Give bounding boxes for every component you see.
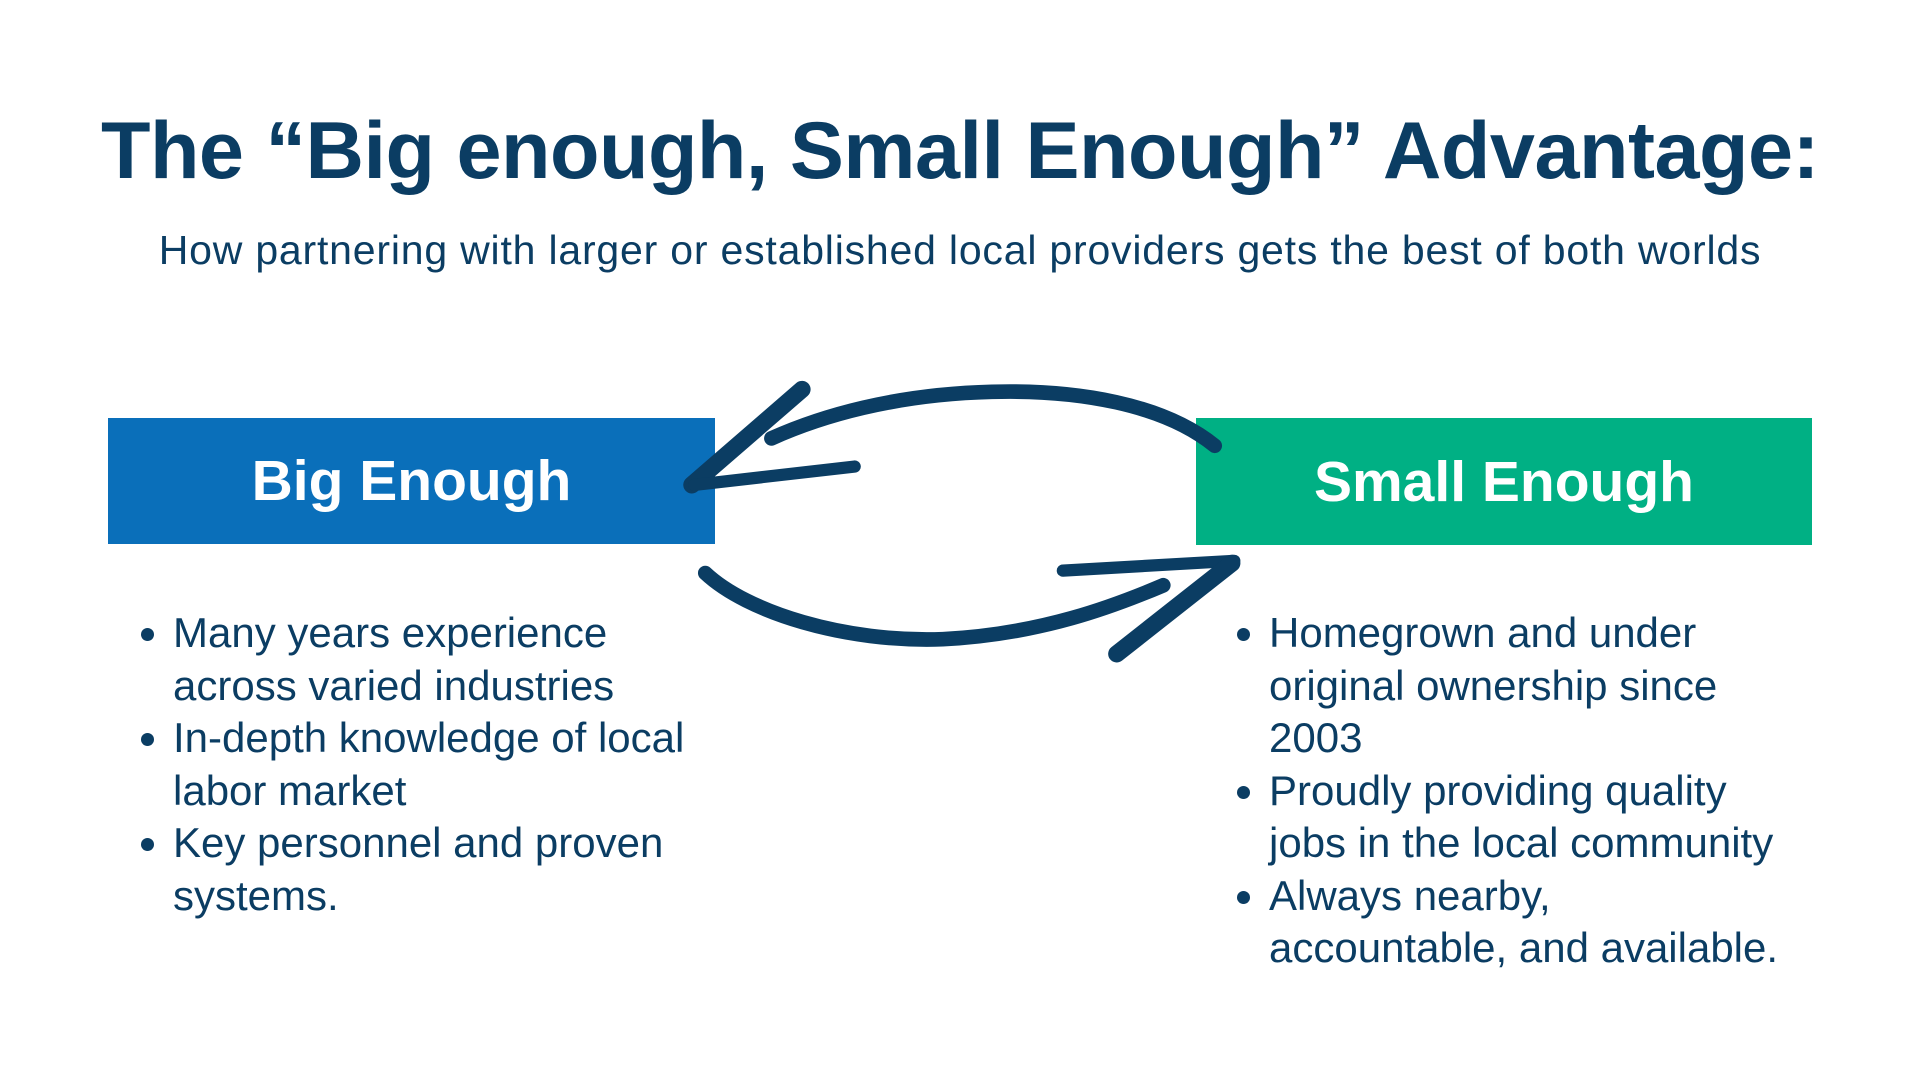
list: big enough bullets: systems. xyxy=(173,872,339,918)
panel: small enough header xyxy=(1196,418,1812,545)
list: big enough bullets: Many years experience xyxy=(173,609,607,656)
list: small enough bullets: Always nearby, xyxy=(1269,872,1551,918)
list: big enough bullets: In-depth knowledge of local xyxy=(173,714,684,761)
list: small enough bullets: Proudly providing quality xyxy=(1269,766,1727,814)
list: small enough bullets: 2003 xyxy=(1269,714,1362,761)
panel: big enough header xyxy=(108,418,715,544)
list: small enough bullets: jobs in the local community xyxy=(1269,819,1773,866)
arrow: bottom, left to right xyxy=(705,561,1234,654)
panel: big enough header: Big Enough xyxy=(252,449,571,513)
panel: small enough header: Small Enough xyxy=(1314,450,1694,514)
arrow: top, right to left xyxy=(692,389,1215,485)
list: small enough bullets: original ownership since xyxy=(1269,662,1717,708)
list: small enough bullets: accountable, and available. xyxy=(1269,924,1778,971)
list: big enough bullets: Key personnel and proven xyxy=(173,819,663,866)
list: small enough bullets xyxy=(1237,609,1778,971)
list: big enough bullets: across varied industries xyxy=(173,662,614,708)
title: The “Big enough, Small Enough” Advantage: xyxy=(101,106,1819,196)
list: big enough bullets: labor market xyxy=(173,766,406,814)
list: big enough bullets xyxy=(141,609,684,918)
list: small enough bullets: Homegrown and under xyxy=(1269,609,1696,656)
subtitle: How partnering with larger or established local providers gets the best of both worlds xyxy=(159,227,1761,273)
